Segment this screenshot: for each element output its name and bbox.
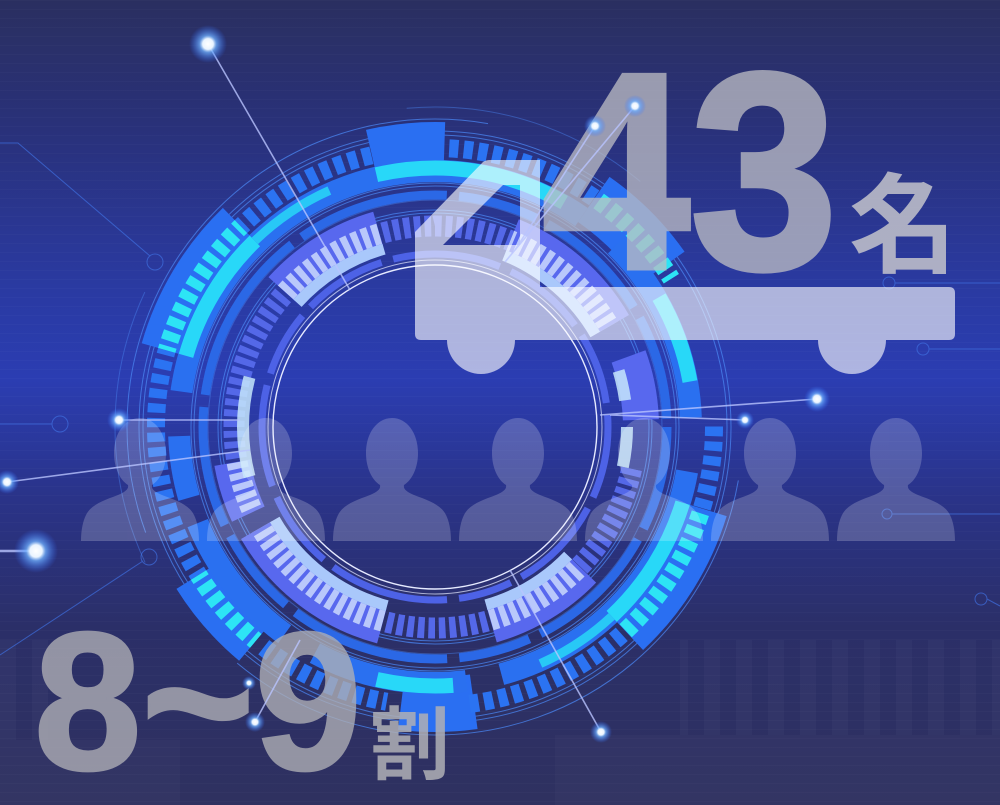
- pale inner bands: [250, 242, 620, 612]
- number: 43: 43: [542, 16, 838, 328]
- dark inner dashed ring: [262, 254, 608, 600]
- icon: row of seven people: [81, 418, 955, 541]
- glowing nodes: [0, 25, 830, 743]
- inner tick ring: [234, 226, 636, 628]
- pale side arcs: [243, 235, 627, 619]
- outer wedge bands: [158, 150, 712, 704]
- dashed blue middle ring: [203, 195, 667, 659]
- outer thin arcs: [115, 107, 755, 747]
- circuit lines in background: [0, 143, 1000, 655]
- unit: 割: 割: [370, 701, 450, 790]
- HUD ring graphic: [115, 107, 755, 747]
- outer tick ring blue: [156, 148, 714, 706]
- inner wedges: [229, 221, 641, 633]
- cyan solid bands: [176, 168, 694, 686]
- outer tick ring cyan: [158, 194, 709, 648]
- number: 8~9: 8~9: [34, 592, 362, 805]
- inner tick ring light: [234, 226, 636, 628]
- light beams: [0, 44, 817, 732]
- unit: 名: 名: [849, 166, 957, 287]
- blue band under cyan: [179, 171, 691, 683]
- cyan thin bands: [176, 168, 694, 686]
- white inner rings: [268, 260, 602, 594]
- icon: truck silhouette: [415, 160, 955, 374]
